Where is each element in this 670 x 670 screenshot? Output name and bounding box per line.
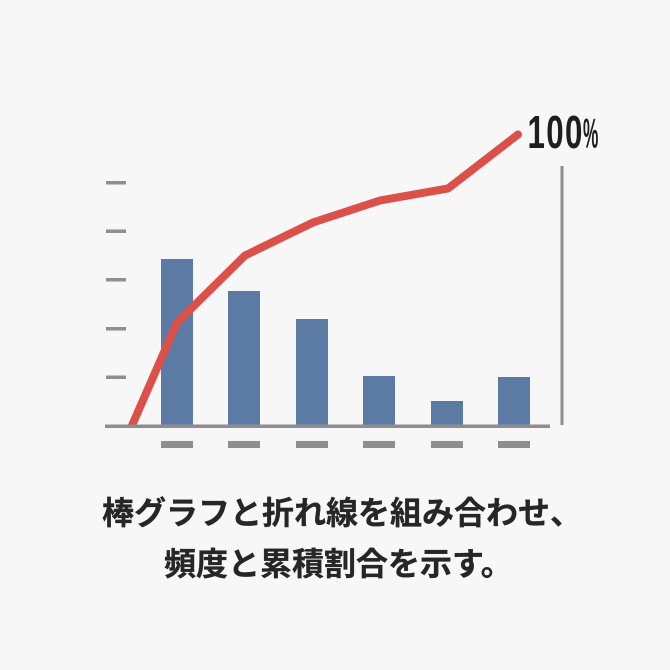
100% label: % [583, 110, 598, 157]
right axis [560, 166, 564, 425]
left axis tick marks [106, 181, 126, 379]
caption: 棒グラフと折れ線を組み合わせ、 [102, 495, 582, 531]
100% label: 100 [528, 107, 584, 159]
caption: 頻度と累積割合を示す。 [164, 546, 513, 582]
bar chart [161, 259, 530, 426]
x axis category labels [161, 441, 530, 448]
baseline axis [105, 424, 550, 428]
background strip below baseline [120, 427, 150, 435]
line end cap [514, 130, 522, 138]
caption [102, 495, 582, 582]
cumulative line [130, 134, 518, 430]
